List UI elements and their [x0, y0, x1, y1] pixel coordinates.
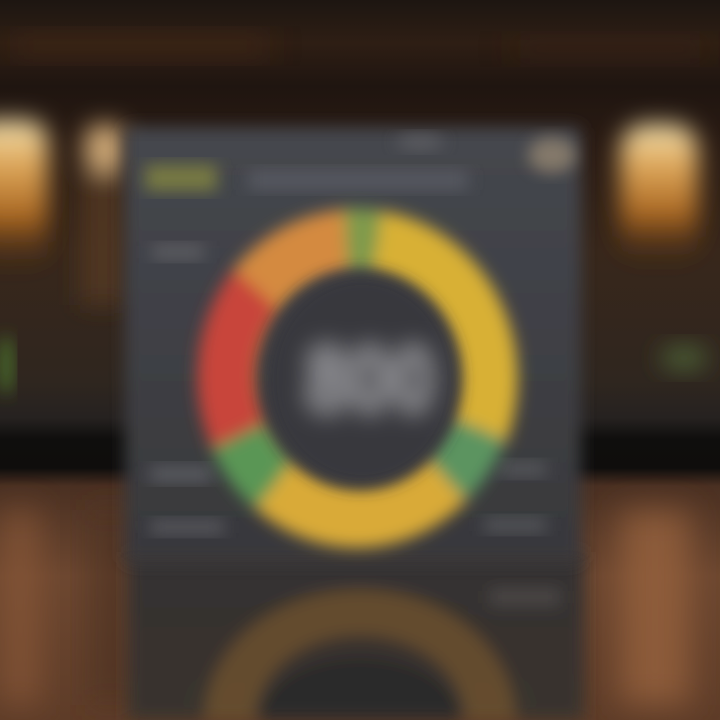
segment: green lower left — [238, 436, 274, 485]
segment: yellow bottom — [272, 479, 446, 517]
center disc — [264, 272, 460, 488]
wall lamp: small left — [80, 124, 126, 305]
segment: green top — [346, 240, 378, 242]
right label lower — [500, 462, 546, 476]
logo block — [145, 165, 217, 191]
table grain — [0, 510, 690, 705]
left label top — [152, 245, 204, 259]
green glow: left — [0, 335, 13, 395]
gauge card — [125, 127, 581, 563]
segment: green lower right — [446, 428, 478, 479]
green glow: right — [660, 346, 708, 370]
wall lamp: right — [620, 124, 698, 264]
segment: yellow right — [378, 242, 489, 434]
center score: 800 — [305, 326, 435, 433]
left label lower — [150, 466, 212, 482]
heading bar — [248, 170, 468, 190]
segment: red — [226, 282, 262, 444]
card reflection on table — [128, 552, 584, 720]
wall lamp: left — [0, 120, 48, 270]
ring base — [228, 240, 486, 516]
card top glare — [528, 137, 576, 173]
left label bottom — [150, 520, 224, 534]
card top highlight — [396, 134, 444, 150]
segment: orange — [256, 241, 345, 289]
card panel — [125, 127, 581, 563]
donut gauge — [226, 240, 489, 517]
right label bottom — [484, 518, 546, 532]
